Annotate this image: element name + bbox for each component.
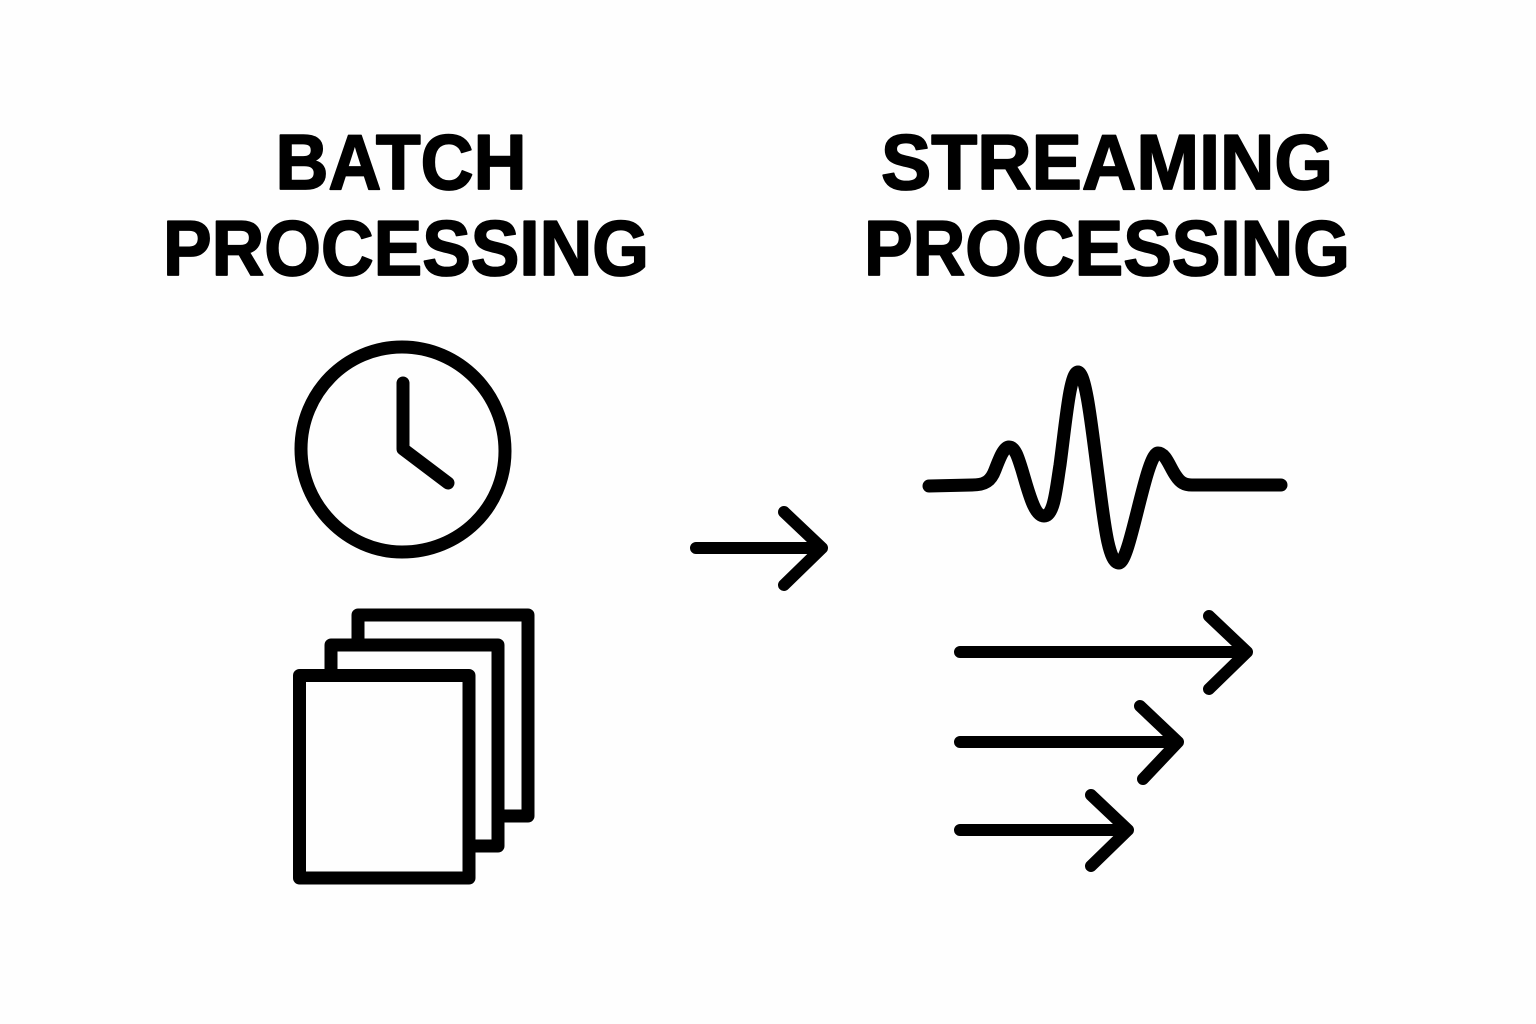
heading: streaming processing: STREAMING — [881, 118, 1333, 206]
icon: long stream arrow — [960, 616, 1247, 689]
heading: batch processing: BATCH — [276, 118, 526, 206]
heading: streaming processing — [864, 118, 1350, 292]
icon: clock — [301, 347, 505, 552]
heading: batch processing — [163, 118, 649, 292]
icon: medium stream arrow — [960, 706, 1178, 779]
icon: short stream arrow — [960, 795, 1128, 866]
heading: streaming processing: PROCESSING — [864, 204, 1350, 292]
icon: waveform — [929, 372, 1281, 563]
arrow: batch to streaming — [696, 512, 822, 585]
icon: stacked documents — [300, 615, 528, 878]
heading: batch processing: PROCESSING — [163, 204, 649, 292]
